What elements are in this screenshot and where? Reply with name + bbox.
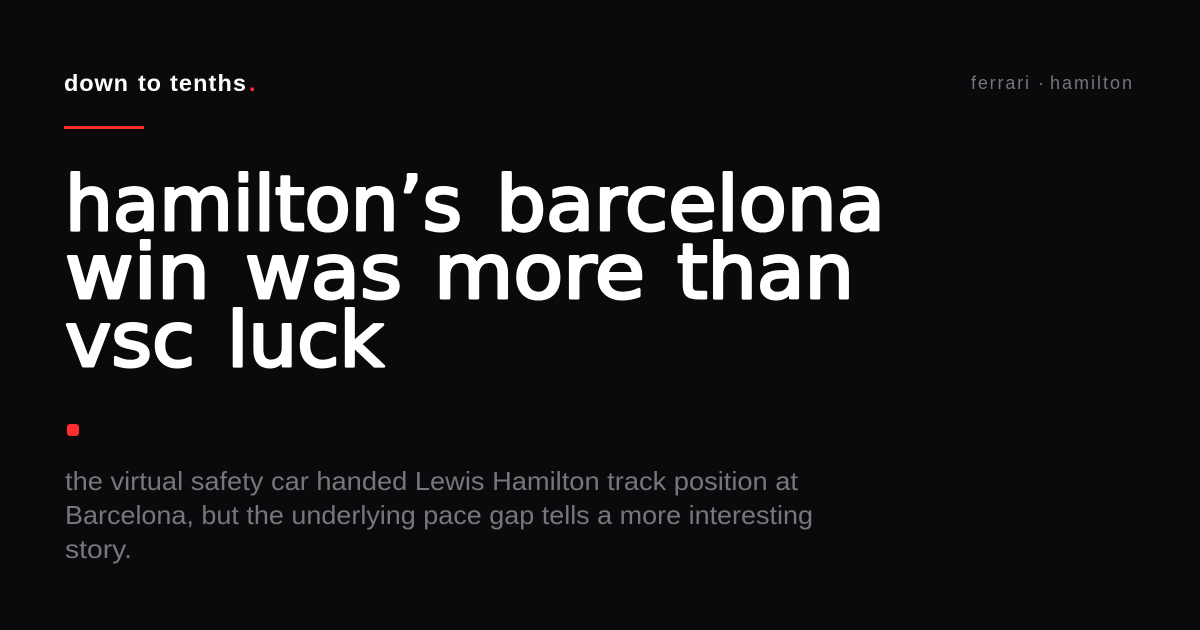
brand wordmark: tenths [170,70,246,96]
description text: Barcelona, but the underlying pace gap tells a more interesting [65,500,813,530]
title: than [677,227,854,316]
description text: the virtual safety car handed Lewis Hamilton track position at [65,466,799,496]
title: was [245,227,402,316]
title: barcelona [496,159,885,248]
tag line: ferrari hamilton [971,73,1132,93]
tag line: ferrari hamilton: hamilton [1050,73,1132,93]
title: hamilton’s [65,159,462,248]
brand wordmark: down [64,70,128,96]
description text: story. [65,534,132,564]
red accent rule [64,126,144,129]
description text [65,466,813,564]
tag line: ferrari hamilton: ferrari [971,73,1029,93]
tag line: ferrari hamilton: · [1038,73,1044,93]
title: more [434,227,645,316]
brand wordmark [64,70,256,96]
brand wordmark: to [138,70,161,96]
title [65,159,885,384]
title: vsc [65,295,195,384]
red dot marker [67,424,79,436]
title: win [65,227,210,316]
title: luck [227,295,384,384]
brand wordmark: . [249,70,256,96]
